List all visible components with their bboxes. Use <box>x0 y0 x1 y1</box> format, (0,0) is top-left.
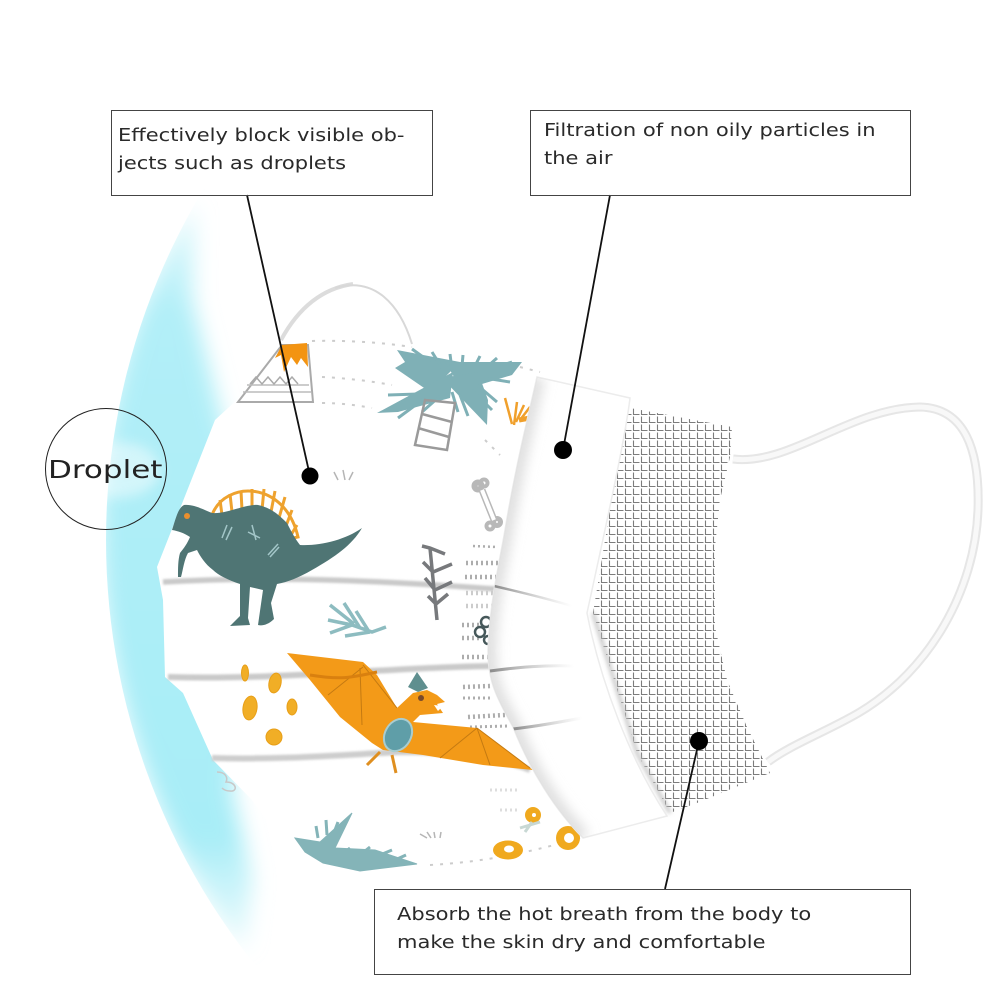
callout: filtration <box>530 110 911 196</box>
dotted stitching <box>312 341 580 865</box>
callout: block droplets: Effectively block visible ob- <box>118 126 405 146</box>
mask illustration <box>106 194 982 942</box>
ear loop left <box>281 284 412 344</box>
leader line 2 <box>554 195 610 459</box>
ear loop right <box>733 407 978 762</box>
clover outline <box>475 617 492 644</box>
leaf teal <box>328 603 386 636</box>
dotted marks <box>462 546 520 810</box>
callout: absorb breath: Absorb the hot breath from the body to <box>397 905 811 925</box>
leader line 3 <box>665 732 708 889</box>
spinosaurus dinosaur <box>172 505 362 626</box>
mask outer layer <box>157 342 590 878</box>
bone <box>475 481 500 528</box>
orange eggs <box>241 665 297 745</box>
orange grass <box>505 398 530 425</box>
grass ticks <box>334 470 441 838</box>
droplet label <box>45 408 167 530</box>
white middle layer <box>488 377 667 838</box>
palm trunk <box>415 400 455 450</box>
callout: block droplets <box>111 110 433 196</box>
leader line 1 <box>247 195 318 484</box>
mesh inner layer <box>593 408 770 813</box>
callout: block droplets: jects such as droplets <box>118 154 346 174</box>
palm top <box>377 349 522 425</box>
callout: filtration: Filtration of non oily particles in <box>544 121 876 141</box>
leaf grey <box>422 546 452 620</box>
small cloud outline <box>217 772 235 791</box>
droplet label: Droplet <box>48 455 162 484</box>
tent decoration <box>238 343 313 402</box>
white glow behind droplet label <box>76 442 160 498</box>
callout: absorb breath: make the skin dry and comfortable <box>397 933 766 953</box>
callout: absorb breath <box>374 889 911 975</box>
pterodactyl <box>287 653 533 773</box>
orange flowers <box>493 807 580 860</box>
palm bottom <box>295 813 417 871</box>
callout: filtration: the air <box>544 149 612 169</box>
spinosaurus sail <box>212 489 298 545</box>
droplet shield <box>100 205 260 950</box>
